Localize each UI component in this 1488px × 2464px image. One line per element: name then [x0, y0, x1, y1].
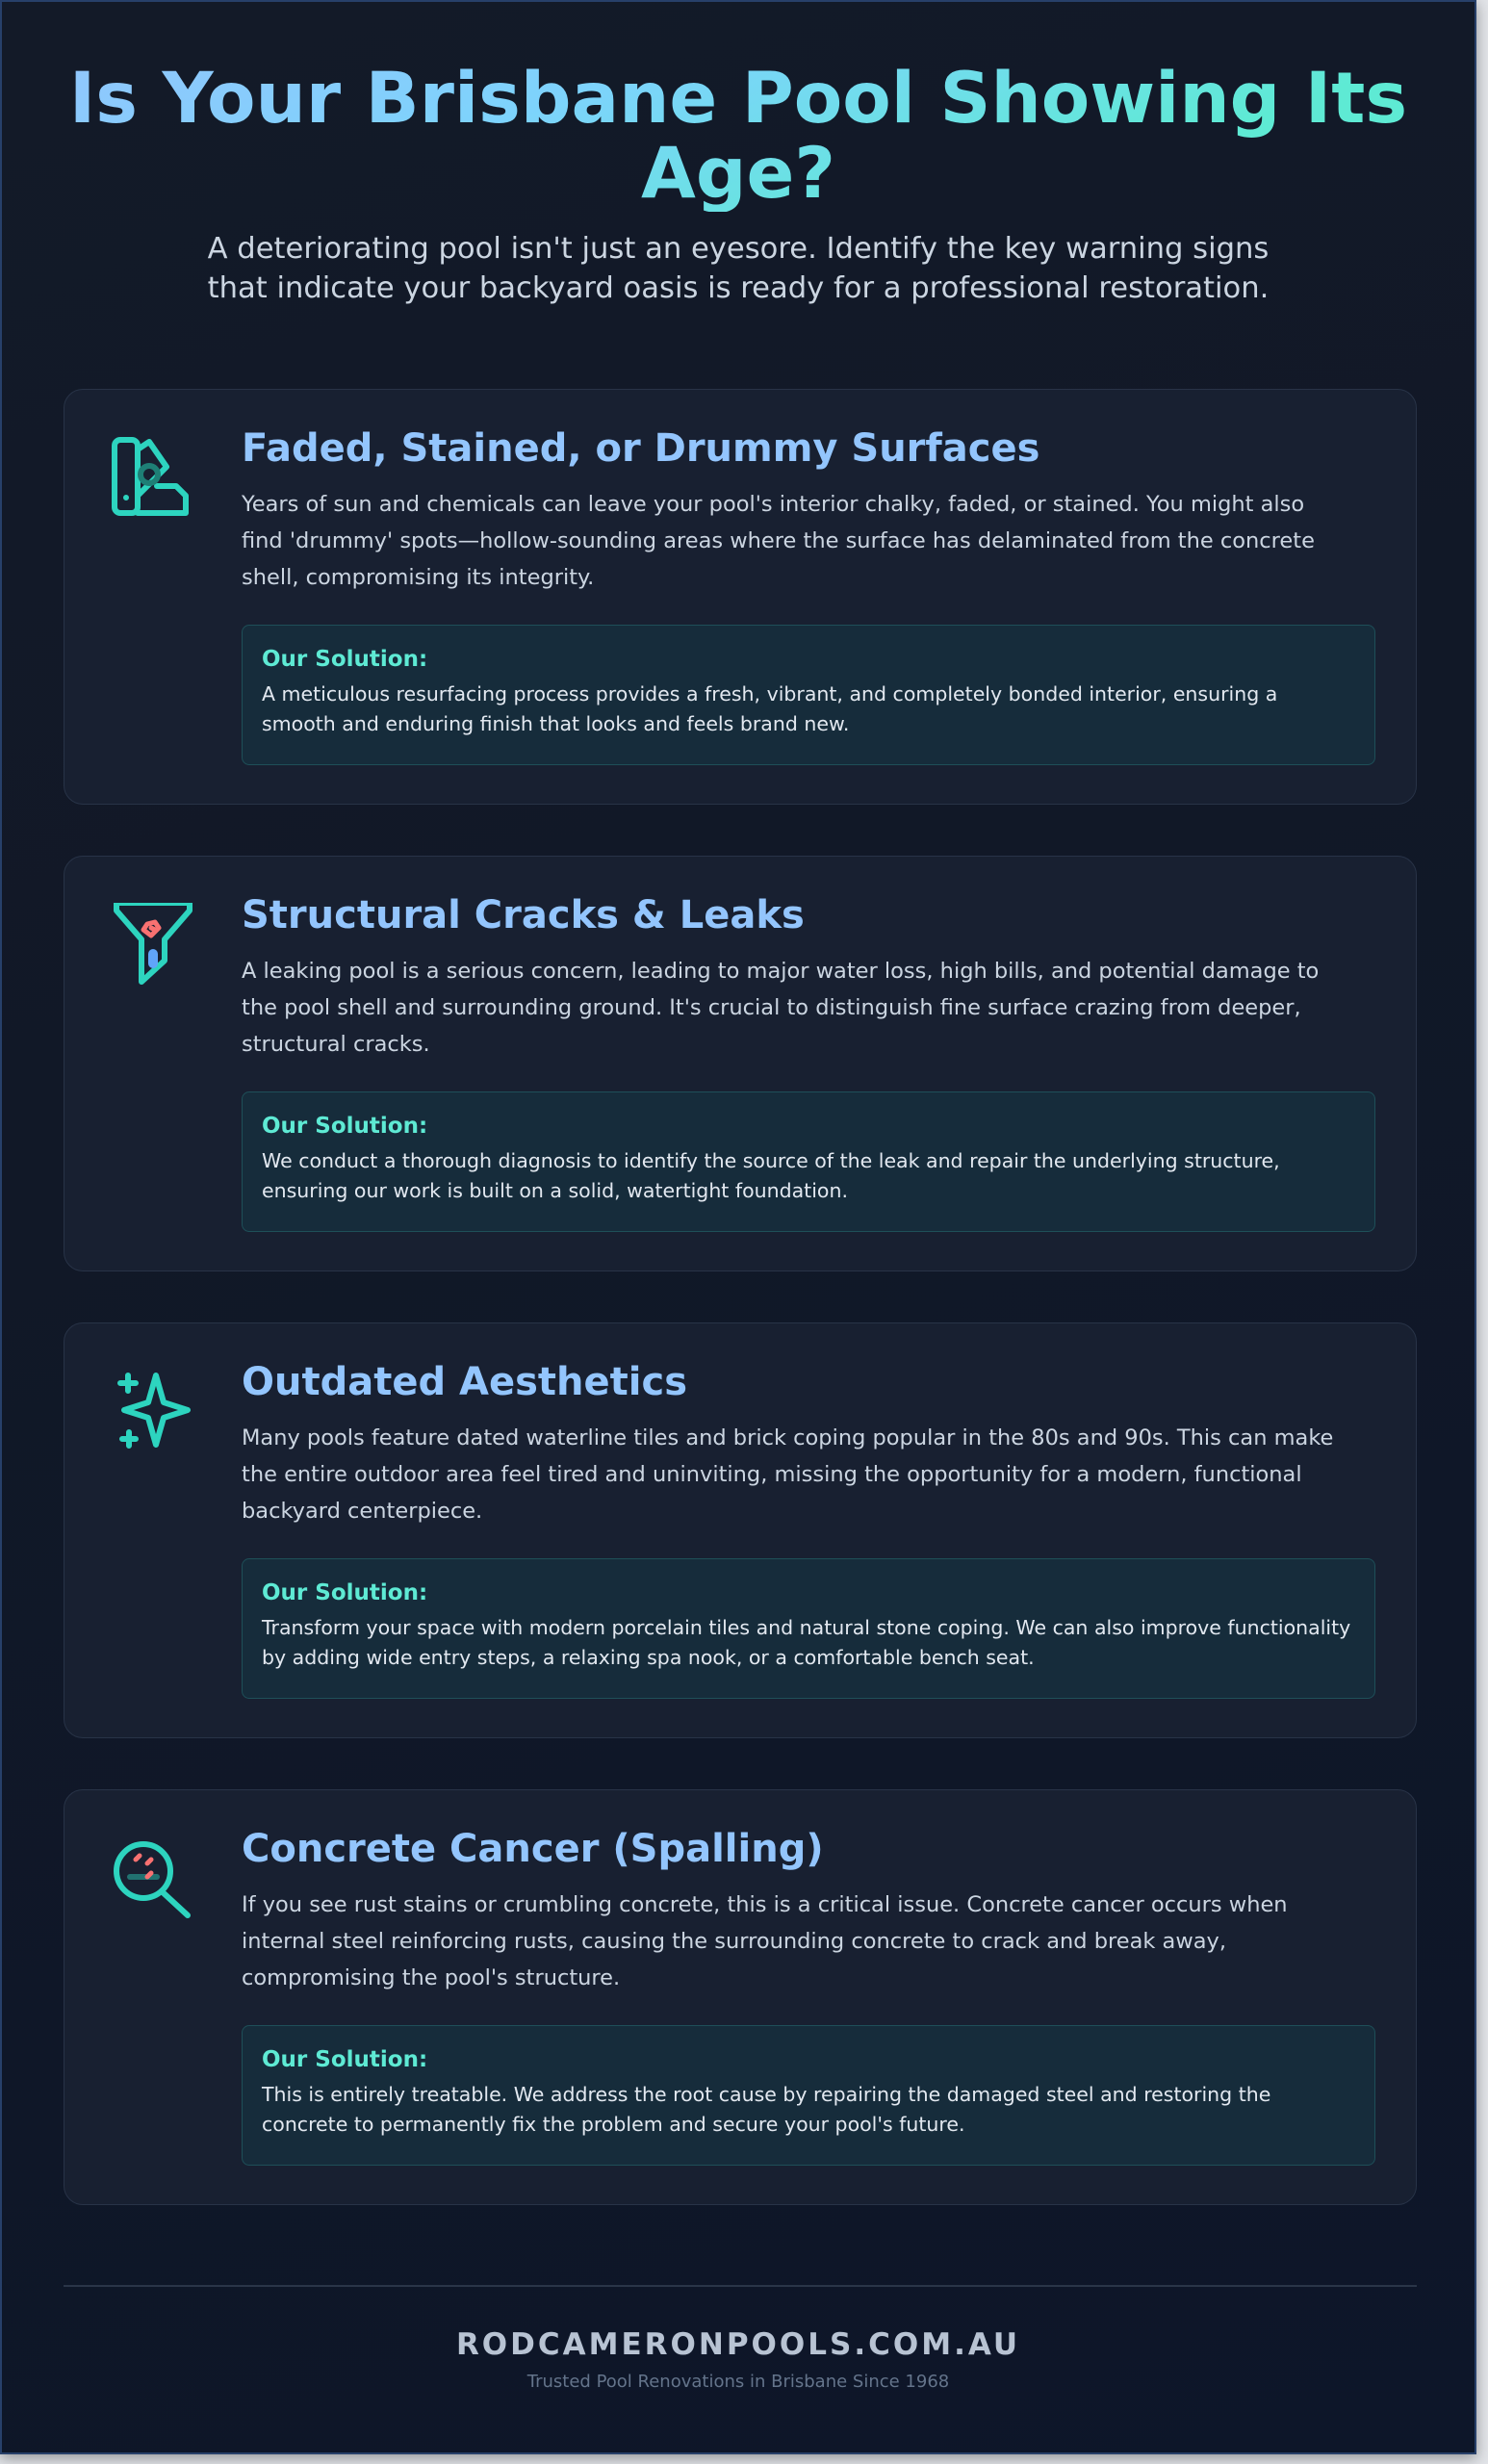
- text block: A leaking pool is a serious concern, leading to major water loss, high bills, and potential damage to the pool shell and surrounding ground. It's crucial to distinguish fine surface crazing from deeper, structural cracks.: [242, 959, 1319, 1057]
- icon: funnel leak: [114, 903, 192, 985]
- subtitle: A deteriorating pool isn't just an eyesore. Identify the key warning signs that indicate your backyard oasis is ready for a professional restoration.: [208, 232, 1269, 305]
- callout: solution: [242, 625, 1375, 765]
- heading: Faded, Stained, or Drummy Surfaces: [242, 426, 1039, 471]
- panel: outdated aesthetics: [64, 1322, 1417, 1738]
- callout: solution: We conduct a thorough diagnosis to identify the source of the leak and repair the underlying structure,: [262, 1149, 1280, 1172]
- heading: Structural Cracks & Leaks: [242, 893, 805, 937]
- callout: solution: Our Solution:: [262, 647, 427, 672]
- footer: website: RODCAMERONPOOLS.COM.AU: [456, 2327, 1020, 2362]
- callout: solution: Our Solution:: [262, 1114, 427, 1139]
- icon: magnifier: [114, 1841, 191, 1918]
- callout: solution: [242, 1091, 1375, 1232]
- callout: solution: concrete to permanently fix the problem and secure your pool's future.: [262, 2113, 965, 2136]
- callout: solution: Our Solution:: [262, 1580, 427, 1605]
- callout: solution: [242, 1558, 1375, 1699]
- callout: solution: Transform your space with modern porcelain tiles and natural stone coping. We can also improve functionality: [262, 1616, 1350, 1639]
- callout: solution: by adding wide entry steps, a relaxing spa nook, or a comfortable bench seat.: [262, 1646, 1035, 1669]
- icon: sparkles: [117, 1373, 191, 1449]
- callout: solution: ensuring our work is built on a solid, watertight foundation.: [262, 1179, 848, 1202]
- heading: Outdated Aesthetics: [242, 1360, 687, 1404]
- callout: solution: smooth and enduring finish that looks and feels brand new.: [262, 712, 849, 735]
- text block: Years of sun and chemicals can leave your pool's interior chalky, faded, or stained. You might also find 'drummy' spots—hollow-sounding areas where the surface has delaminated from the concrete shell, compromising its integrity.: [242, 492, 1315, 590]
- panel: concrete cancer: [64, 1789, 1417, 2205]
- callout: solution: Our Solution:: [262, 2047, 427, 2072]
- icon: swatches: [112, 437, 189, 516]
- heading: Concrete Cancer (Spalling): [242, 1827, 824, 1871]
- title: [2, 62, 1475, 212]
- title: Age?: [641, 133, 835, 215]
- text block: Many pools feature dated waterline tiles and brick coping popular in the 80s and 90s. This can make the entire outdoor area feel tired and uninviting, missing the opportunity for a modern, functional backyard centerpiece.: [242, 1425, 1333, 1524]
- callout: solution: A meticulous resurfacing process provides a fresh, vibrant, and completely bonded interior, ensuring a: [262, 682, 1277, 706]
- footer: tagline: Trusted Pool Renovations in Brisbane Since 1968: [527, 2372, 949, 2392]
- text block: If you see rust stains or crumbling concrete, this is a critical issue. Concrete cancer occurs when internal steel reinforcing rusts, causing the surrounding concrete to crack and break away, compromising the pool's structure.: [242, 1892, 1288, 1990]
- callout: solution: This is entirely treatable. We address the root cause by repairing the damaged steel and restoring the: [262, 2083, 1270, 2106]
- callout: solution: [242, 2025, 1375, 2166]
- panel: structural cracks: [64, 856, 1417, 1271]
- title: Is Your Brisbane Pool Showing Its: [69, 58, 1407, 140]
- panel: faded surfaces: [64, 389, 1417, 805]
